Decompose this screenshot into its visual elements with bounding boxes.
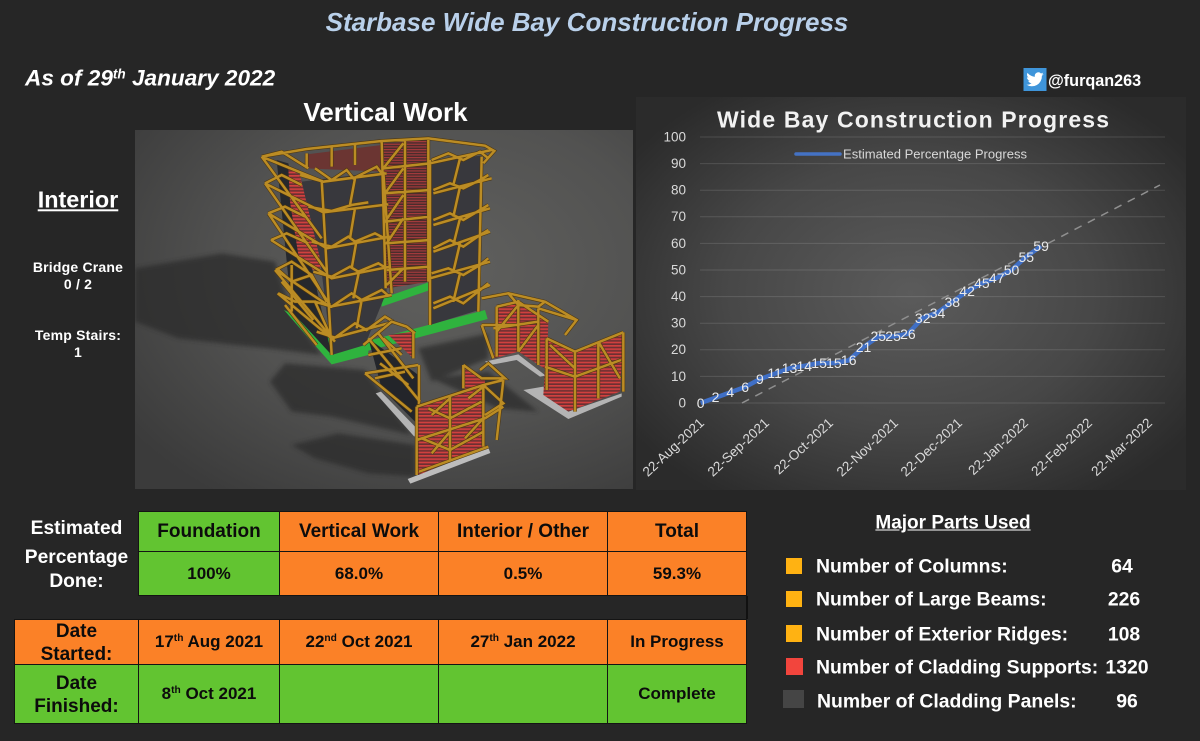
y axis labels: 80 xyxy=(671,182,686,198)
table: percentage done xyxy=(138,511,747,596)
header: foundation xyxy=(138,511,280,552)
data labels: 15 xyxy=(811,355,827,371)
legend square: cladding supports xyxy=(786,658,803,675)
bridge crane count: Bridge Crane xyxy=(33,259,123,275)
value: total xyxy=(607,551,747,596)
y axis labels: 0 xyxy=(678,396,686,410)
data labels: 6 xyxy=(741,379,749,395)
label: cladding panels: Number of Cladding Panels: xyxy=(817,690,1077,712)
x axis labels: 22-Sep-2021 xyxy=(705,415,772,479)
temp stairs count: 1 xyxy=(74,344,82,360)
value: large beams: 226 xyxy=(1108,588,1140,610)
legend square: large beams xyxy=(786,591,802,607)
label: estimated percentage done: Done: xyxy=(49,571,104,592)
label: exterior ridges: Number of Exterior Ridges: xyxy=(816,623,1068,645)
temp stairs count xyxy=(35,327,121,360)
label: columns: Number of Columns: xyxy=(816,555,1008,577)
label: estimated percentage done: Estimated xyxy=(31,518,122,539)
value: cladding panels: 96 xyxy=(1116,690,1138,712)
back wall top cladding xyxy=(307,145,383,172)
x axis labels: 22-Feb-2022 xyxy=(1028,415,1095,479)
data labels: 34 xyxy=(930,305,945,321)
value: interior / other xyxy=(438,551,608,596)
divider strip between tables xyxy=(746,596,748,619)
value: foundation xyxy=(138,551,280,596)
data labels: 55 xyxy=(1019,249,1034,265)
row label: date started xyxy=(14,619,139,665)
wall section centre xyxy=(363,322,420,437)
legend square: cladding panels xyxy=(783,690,804,708)
y axis labels: 60 xyxy=(671,236,686,251)
data labels: 25 xyxy=(885,328,901,344)
legend square: exterior ridges xyxy=(786,625,802,642)
data labels: 42 xyxy=(959,283,975,299)
total finish status: complete xyxy=(607,664,747,724)
row label: date finished xyxy=(14,664,139,724)
data labels: 59 xyxy=(1033,238,1049,254)
heading: interior: Interior xyxy=(38,186,118,212)
wall section far right xyxy=(523,332,623,419)
data labels: 25 xyxy=(871,328,886,344)
value: cladding supports: 1320 xyxy=(1105,656,1149,678)
header: vertical work: Vertical Work xyxy=(299,520,419,542)
value: vertical work xyxy=(279,551,439,596)
panel: interior xyxy=(33,186,123,360)
label: estimated percentage done: Percentage xyxy=(25,547,128,568)
front right panels xyxy=(430,156,482,325)
twitter handle: @furqan263 xyxy=(1048,72,1141,90)
data labels: 32 xyxy=(915,310,931,326)
row label: date finished: Finished: xyxy=(34,696,119,717)
header: total: Total xyxy=(655,520,699,542)
data labels: 16 xyxy=(841,352,857,368)
date heading: As of 29th January 2022 xyxy=(25,66,275,91)
data labels: 47 xyxy=(989,270,1005,286)
chart title: Wide Bay Construction Progress xyxy=(717,106,1109,132)
interior finish date: empty xyxy=(438,664,608,724)
foundation finish date xyxy=(138,664,280,724)
interior start date: 27th Jan 2022 xyxy=(470,632,576,651)
legend square: columns xyxy=(786,558,802,574)
header: vertical work xyxy=(279,511,439,552)
value: vertical work: 68.0% xyxy=(335,564,383,582)
y axis labels: 10 xyxy=(671,369,686,384)
building frame xyxy=(262,138,494,355)
x axis labels: 22-Dec-2021 xyxy=(898,415,965,479)
wall section upper right xyxy=(482,293,577,377)
value: exterior ridges: 108 xyxy=(1108,623,1140,645)
value: foundation: 100% xyxy=(187,564,231,582)
data labels: 38 xyxy=(945,294,960,310)
value: total: 59.3% xyxy=(653,564,701,582)
total finish status: complete: Complete xyxy=(638,684,716,703)
front left panels xyxy=(302,172,387,355)
data labels: 45 xyxy=(974,275,990,291)
data labels: 26 xyxy=(900,326,916,342)
vertical work finish date: empty xyxy=(279,664,439,724)
wall section bottom xyxy=(408,363,505,484)
foundation start date xyxy=(138,619,280,665)
floor xyxy=(135,130,633,489)
y axis labels: 100 xyxy=(663,130,686,144)
header: interior / other xyxy=(438,511,608,552)
header: total xyxy=(607,511,747,552)
title: Starbase Wide Bay Construction Progress xyxy=(326,7,848,37)
foundation start date: 17th Aug 2021 xyxy=(155,632,263,651)
x axis labels: 22-Jan-2022 xyxy=(965,415,1031,478)
y axis labels: 20 xyxy=(671,342,686,357)
data labels: 21 xyxy=(856,339,871,355)
data labels: 9 xyxy=(756,371,764,387)
total status: in progress xyxy=(607,619,747,665)
y axis labels: 50 xyxy=(671,262,686,278)
vertical work start date: 22nd Oct 2021 xyxy=(306,632,412,651)
y axis labels: 70 xyxy=(671,209,686,224)
y axis labels xyxy=(663,130,686,410)
y axis labels: 30 xyxy=(671,316,686,330)
cast shadows xyxy=(135,253,538,477)
x axis labels xyxy=(640,415,1155,479)
header: foundation: Foundation xyxy=(157,520,261,542)
left side dark panel xyxy=(277,160,332,355)
heading: major parts used: Major Parts Used xyxy=(875,512,1031,534)
bridge crane count xyxy=(33,259,123,292)
x axis labels: 22-Mar-2022 xyxy=(1088,415,1155,479)
left side red cladding xyxy=(288,168,322,273)
data labels: 0 xyxy=(697,395,705,411)
y axis labels: 90 xyxy=(671,156,686,171)
legend: Estimated Percentage Progress xyxy=(843,146,1027,162)
value: columns: 64 xyxy=(1111,555,1133,577)
x axis labels: 22-Nov-2021 xyxy=(834,415,901,479)
data labels: 15 xyxy=(826,355,842,371)
data labels: 13 xyxy=(782,360,797,376)
label: estimated percentage done xyxy=(25,518,128,592)
progress line xyxy=(701,246,1041,403)
table: dates xyxy=(14,619,747,724)
vertical work start date xyxy=(279,619,439,665)
panel: 3D model of vertical work xyxy=(135,130,633,489)
bridge crane count: 0 / 2 xyxy=(64,276,92,292)
data labels: 14 xyxy=(797,358,812,374)
heading: vertical work: Vertical Work xyxy=(303,97,468,127)
data labels: 2 xyxy=(712,389,720,405)
data labels xyxy=(697,238,1049,411)
y axis labels: 40 xyxy=(671,289,686,304)
temp stairs count: Temp Stairs: xyxy=(35,327,121,343)
value: interior / other: 0.5% xyxy=(504,564,542,582)
back wall cladding xyxy=(382,140,430,288)
x axis labels: 22-Aug-2021 xyxy=(640,415,707,479)
green foundation xyxy=(284,282,488,364)
header: interior / other: Interior / Other xyxy=(457,520,589,542)
row label: date finished: Date xyxy=(56,673,97,694)
data labels: 50 xyxy=(1004,262,1019,278)
row label: date started: Date xyxy=(56,621,97,642)
foundation finish date: 8th Oct 2021 xyxy=(162,684,256,703)
icon: twitter xyxy=(1024,68,1046,91)
dashed trend line xyxy=(742,185,1160,403)
interior start date xyxy=(438,619,608,665)
data labels: 4 xyxy=(726,384,734,400)
panel: major parts used xyxy=(783,512,1149,712)
label: cladding supports: Number of Cladding Supports: xyxy=(816,656,1098,678)
row label: date started: Started: xyxy=(41,644,112,665)
data labels: 11 xyxy=(767,365,782,381)
x axis labels: 22-Oct-2021 xyxy=(771,415,836,477)
label: large beams: Number of Large Beams: xyxy=(816,588,1047,610)
total status: in progress: In Progress xyxy=(630,632,724,651)
